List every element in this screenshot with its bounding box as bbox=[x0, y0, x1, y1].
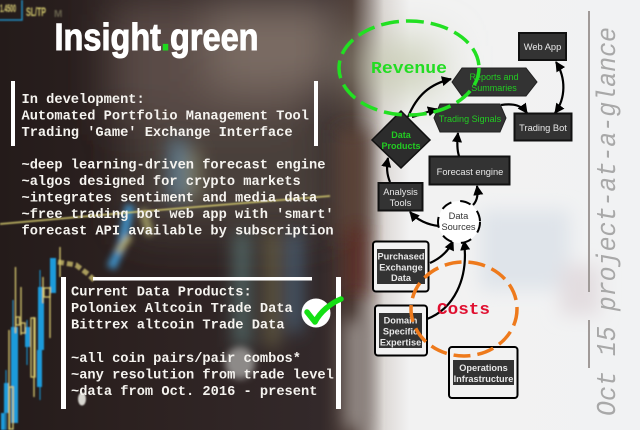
node: data sources: Sources bbox=[441, 222, 476, 232]
vertical label: project at a glance: Oct 15 project-at-a-glance bbox=[594, 27, 624, 416]
panel: current data products bbox=[61, 277, 341, 409]
node: purchased exchange data: Purchased bbox=[378, 252, 424, 262]
node: analysis tools: Analysis bbox=[383, 187, 418, 197]
panel: current data products: Poloniex Altcoin Trade Data bbox=[71, 302, 293, 317]
node: data sources bbox=[438, 201, 480, 243]
node: operations infrastructure: Infrastructure bbox=[454, 374, 513, 384]
ticker text top left: 1.4500 bbox=[0, 3, 16, 15]
node: web app: Web App bbox=[524, 42, 561, 52]
panel: in development: In development: bbox=[22, 93, 145, 108]
node: reports and summaries: Summaries bbox=[471, 83, 517, 93]
text block: features: ~integrates sentiment and media data bbox=[22, 192, 317, 206]
ticker text top left: SL/TP bbox=[26, 5, 46, 19]
node: reports and summaries: Reports and bbox=[469, 72, 519, 82]
diagram arrows bbox=[387, 62, 563, 319]
node: data products bbox=[372, 111, 430, 168]
node: domain specific expertise: Specific bbox=[383, 326, 418, 336]
node: trading signals: Trading Signals bbox=[439, 114, 502, 124]
text block: features bbox=[22, 158, 334, 240]
node: operations infrastructure: Operations bbox=[459, 363, 508, 373]
text block: features: ~deep learning-driven forecast engine bbox=[22, 158, 325, 174]
node: purchased exchange data: Exchange bbox=[379, 262, 423, 272]
costs circle: Costs bbox=[437, 301, 490, 320]
text block: features: forecast API available by subscription bbox=[22, 224, 334, 240]
panel: in development: Trading 'Game' Exchange Interface bbox=[22, 126, 293, 141]
costs circle bbox=[411, 262, 517, 356]
panel: current data products: ~any resolution from trade level bbox=[71, 368, 334, 384]
title: Insight.green: Insight.green bbox=[54, 17, 258, 59]
node: purchased exchange data bbox=[373, 242, 428, 292]
node: data products: Products bbox=[381, 141, 421, 151]
node: data sources: Data bbox=[449, 211, 469, 221]
node: domain specific expertise: Domain bbox=[384, 316, 418, 326]
icon: green check mark bbox=[302, 298, 341, 328]
node: web app bbox=[519, 33, 566, 60]
node: trading bot bbox=[514, 114, 572, 140]
node: trading bot: Trading Bot bbox=[519, 123, 567, 133]
node: data products: Data bbox=[391, 130, 412, 140]
panel: in development bbox=[11, 81, 318, 146]
revenue ellipse bbox=[339, 21, 479, 115]
ticker text top left: M bbox=[54, 9, 62, 20]
node: purchased exchange data: Data bbox=[391, 273, 412, 283]
panel: current data products: ~data from Oct. 2016 - present bbox=[71, 385, 317, 400]
node: trading signals bbox=[434, 104, 506, 132]
node: analysis tools bbox=[378, 183, 422, 210]
node: operations infrastructure bbox=[449, 347, 518, 398]
panel: current data products: ~all coin pairs/pair combos* bbox=[71, 352, 301, 367]
ticker text top left bbox=[0, 0, 62, 20]
node: domain specific expertise: Expertise bbox=[380, 338, 421, 348]
node: reports and summaries bbox=[452, 68, 537, 96]
node: forecast engine bbox=[430, 156, 510, 184]
panel: in development: Automated Portfolio Management Tool bbox=[22, 110, 309, 124]
revenue ellipse: Revenue bbox=[371, 60, 447, 79]
candlestick chart bbox=[1, 247, 60, 430]
text block: features: ~algos designed for crypto markets bbox=[22, 175, 301, 190]
panel: current data products: Bittrex altcoin Trade Data bbox=[71, 318, 285, 334]
node: analysis tools: Tools bbox=[390, 198, 412, 208]
node: forecast engine: Forecast engine bbox=[437, 167, 503, 177]
divider lines bbox=[588, 11, 590, 368]
panel: current data products: Current Data Products: bbox=[71, 286, 252, 300]
text block: features: ~free trading bot web app with 'smart' bbox=[22, 208, 334, 223]
node: domain specific expertise bbox=[375, 306, 427, 356]
